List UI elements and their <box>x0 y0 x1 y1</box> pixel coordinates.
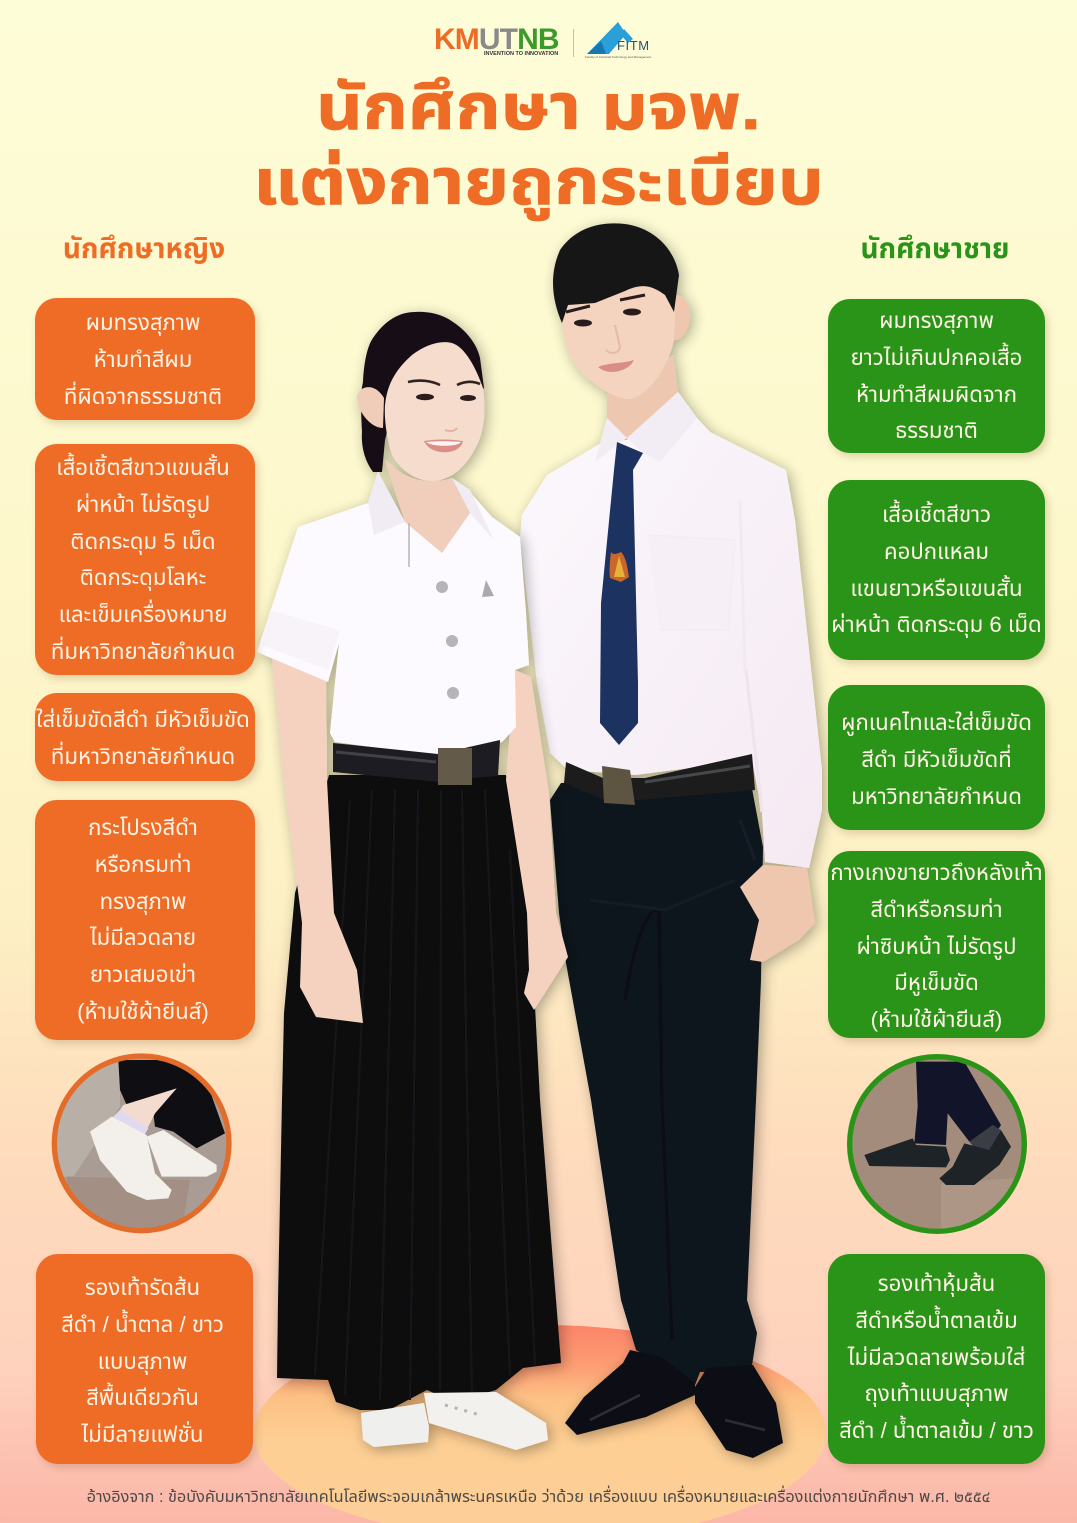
panel: male shoes: รองเท้าหุ้มส้น <box>878 1271 995 1296</box>
panel: male shirt: ผ่าหน้า ติดกระดุม 6 เม็ด <box>831 612 1042 637</box>
male shirt <box>520 392 822 868</box>
panel: male shirt: คอปกแหลม <box>884 539 989 564</box>
male collar <box>595 392 697 462</box>
heading: female students: นักศึกษาหญิง <box>63 233 225 264</box>
panel: male shirt: เสื้อเชิ้ตสีขาว <box>882 502 991 527</box>
panel: female shirt <box>35 444 255 675</box>
logo: KMUTNB: INVENTION TO INNOVATION <box>484 51 558 57</box>
panel: male tie and belt: มหาวิทยาลัยกำหนด <box>851 784 1022 809</box>
panel: female skirt: กระโปรงสีดำ <box>88 815 198 840</box>
logo: FITM: FITM <box>617 38 650 53</box>
panel: female shirt: ที่มหาวิทยาลัยกำหนด <box>51 639 235 664</box>
footer reference: อ้างอิงจาก : ข้อบังคับมหาวิทยาลัยเทคโนโลยีพระจอมเกล้าพระนครเหนือ ว่าด้วย เครื่องแบบ เครื่องหมายและเครื่องแต่งกายนักศึกษา พ.ศ. ๒๕๕๔ <box>87 1488 990 1506</box>
panel: female shoes: สีพื้นเดียวกัน <box>86 1385 199 1410</box>
logo: FITM: Faculty of Industrial Technology and Management <box>585 55 651 59</box>
panel: female shoes: แบบสุภาพ <box>98 1349 187 1374</box>
panel: male tie and belt <box>828 685 1045 830</box>
panel: male shirt <box>828 480 1045 660</box>
panel: female belt <box>35 693 255 781</box>
female belt and buckle <box>333 740 500 785</box>
panel: male trousers: กางเกงขายาวถึงหลังเท้า <box>830 860 1043 885</box>
panel: female shirt: ติดกระดุม 5 เม็ด <box>70 529 216 554</box>
panel: female hair <box>35 298 255 420</box>
floor ellipse <box>254 1325 826 1523</box>
panel: female shirt: และเข็มเครื่องหมาย <box>59 602 227 627</box>
male trousers <box>550 778 763 1385</box>
student: female <box>257 312 568 1450</box>
panel: female skirt: ไม่มีลวดลาย <box>90 925 196 950</box>
panel: male shoes: สีดำ / น้ำตาลเข้ม / ขาว <box>839 1418 1034 1443</box>
panel: female shoes: ไม่มีลายแฟชั่น <box>82 1422 203 1447</box>
icon: male shoes photo <box>847 1054 1027 1234</box>
panel: male shirt: แขนยาวหรือแขนสั้น <box>850 576 1023 601</box>
logo: FITM <box>585 22 652 59</box>
panel: female skirt: หรือกรมท่า <box>95 852 191 877</box>
panel: female skirt: (ห้ามใช้ผ้ายีนส์) <box>77 999 209 1024</box>
panel: male shoes: ถุงเท้าแบบสุภาพ <box>864 1381 1008 1406</box>
panel: male hair <box>828 299 1045 453</box>
panel: female hair: ผมทรงสุภาพ <box>86 310 200 335</box>
title: แต่งกายถูกระเบียบ <box>253 146 824 218</box>
panel: male trousers: สีดำหรือกรมท่า <box>870 897 1003 922</box>
panel: male trousers <box>828 851 1045 1038</box>
panel: female shoes <box>36 1254 253 1464</box>
logo: KMUTNB: KMUTNB <box>434 23 559 56</box>
panel: male shoes: ไม่มีลวดลายพร้อมใส่ <box>848 1345 1025 1370</box>
icon: female shoes photo <box>52 1053 232 1234</box>
panel: male hair: ยาวไม่เกินปกคอเสื้อ <box>851 345 1022 370</box>
female head <box>357 312 484 553</box>
female collar <box>368 472 494 540</box>
student: male <box>520 223 822 1458</box>
female shirt <box>257 472 529 756</box>
panel: female belt: ที่มหาวิทยาลัยกำหนด <box>51 744 235 769</box>
panel: female hair: ห้ามทำสีผม <box>94 347 192 372</box>
panel: female shirt: ผ่าหน้า ไม่รัดรูป <box>76 492 210 517</box>
panel: female skirt: ยาวเสมอเข่า <box>90 962 196 987</box>
female skirt pleats <box>315 790 535 1400</box>
panel: male hair: ห้ามทำสีผมผิดจาก <box>856 382 1017 407</box>
panel: male trousers: มีหูเข็มขัด <box>894 970 979 995</box>
female buttons and pins <box>409 523 494 699</box>
panel: female shoes: รองเท้ารัดส้น <box>85 1275 200 1300</box>
female skirt <box>277 775 561 1410</box>
heading: male students: นักศึกษาชาย <box>861 233 1009 264</box>
panel: male trousers: ผ่าซิบหน้า ไม่รัดรูป <box>856 934 1017 959</box>
panel: female skirt <box>35 800 255 1040</box>
logos <box>434 22 652 59</box>
panel: female belt: ใส่เข็มขัดสีดำ มีหัวเข็มขัด <box>36 707 250 732</box>
male shoes <box>565 1350 783 1458</box>
logo divider <box>573 29 574 57</box>
title: นักศึกษา มจพ. <box>316 71 761 143</box>
panel: female shoes: สีดำ / น้ำตาล / ขาว <box>61 1312 224 1337</box>
panel: male shoes: สีดำหรือน้ำตาลเข้ม <box>855 1308 1018 1333</box>
male belt and buckle <box>564 754 755 805</box>
male neck and head <box>553 223 690 440</box>
panel: male tie and belt: สีดำ มีหัวเข็มขัดที่ <box>861 747 1012 772</box>
title <box>253 71 824 222</box>
panel: male trousers: (ห้ามใช้ผ้ายีนส์) <box>871 1007 1002 1032</box>
panel: female shirt: เสื้อเชิ้ตสีขาวแขนสั้น <box>56 455 230 480</box>
panel: male hair: ผมทรงสุภาพ <box>879 308 994 333</box>
female shoes <box>361 1392 548 1450</box>
panel: female shirt: ติดกระดุมโลหะ <box>80 565 206 590</box>
female arms <box>272 657 568 1023</box>
panel: female skirt: ทรงสุภาพ <box>100 889 186 914</box>
panel: male shoes <box>828 1254 1045 1464</box>
panel: male tie and belt: ผูกเนคไทและใส่เข็มขัด <box>841 710 1032 735</box>
panel: female hair: ที่ผิดจากธรรมชาติ <box>64 384 222 409</box>
male hand <box>740 865 815 962</box>
male tie with crest <box>600 442 643 745</box>
panel: male hair: ธรรมชาติ <box>895 418 978 443</box>
